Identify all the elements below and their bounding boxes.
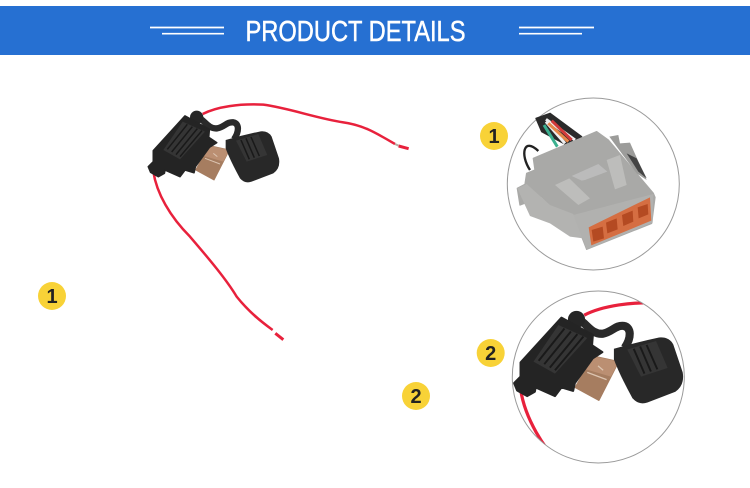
product photo: fuse holder with red wires (148, 104, 409, 340)
badge: 2 centre: 2 (410, 386, 422, 408)
connector wires (524, 113, 582, 170)
circle detail 1: grey connector (507, 98, 679, 270)
badge: 1 beside connector (480, 122, 508, 150)
badge: 2 beside fuse close-up: 2 (485, 343, 496, 365)
badge: 2 beside fuse close-up (477, 339, 505, 367)
title: PRODUCT DETAILS (246, 16, 466, 48)
badge: 1 left: 1 (46, 286, 58, 308)
header banner (0, 6, 750, 55)
badge: 2 centre (402, 382, 430, 410)
badge: 1 left (38, 282, 66, 310)
circle detail 2: fuse close-up (512, 290, 685, 464)
badge: 1 beside connector: 1 (488, 126, 500, 148)
